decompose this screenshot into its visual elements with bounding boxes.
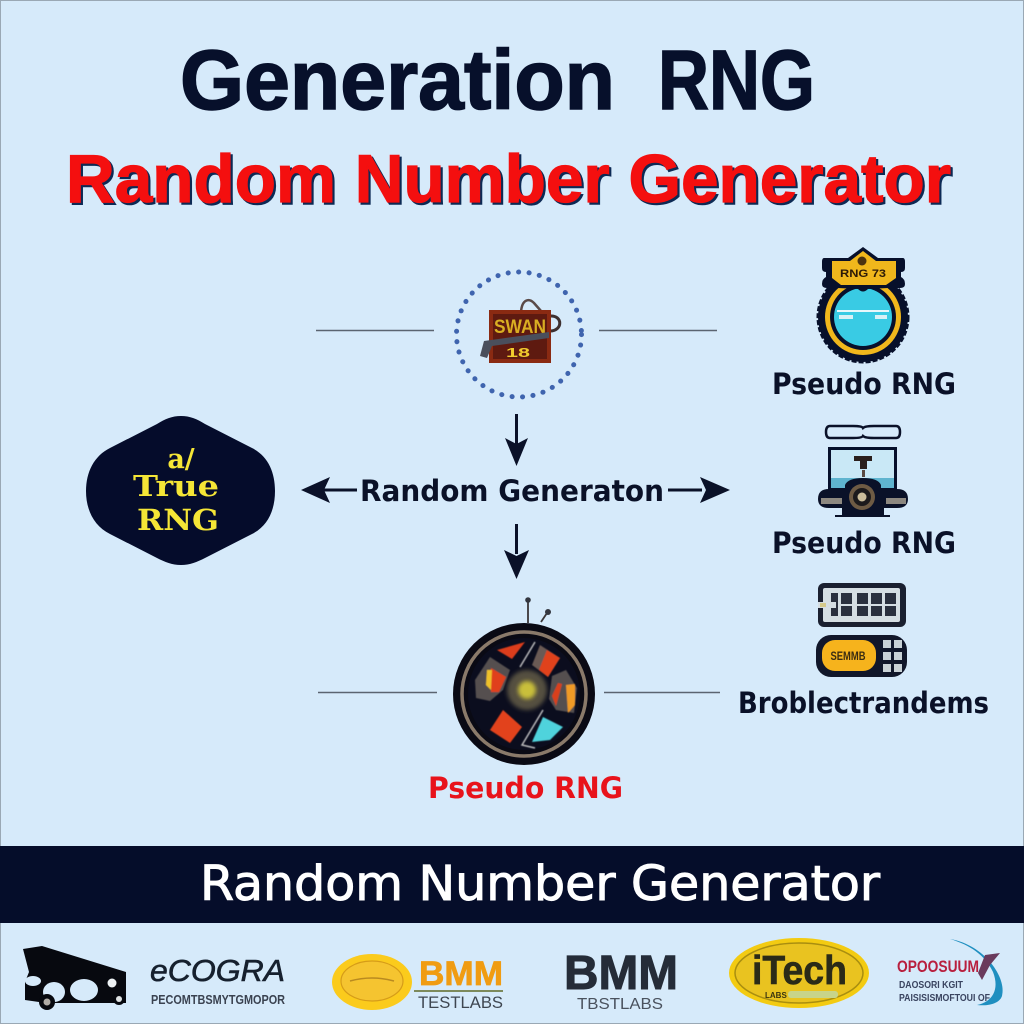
arrow: down to lower node [504,524,529,579]
item: badge icon [818,247,908,362]
arrow: left [301,477,357,503]
connector lines: top node [316,330,717,332]
logo: BMM Testlabs dark: TBSTLABS [577,996,663,1013]
logo: red and blue seal: OPOOSUUM [897,957,979,976]
title [180,33,815,127]
logo: BMM Testlabs gold coin: TESTLABS [418,993,503,1012]
connector lines: lower node [318,692,720,694]
node: True RNG [86,416,275,565]
footer band [0,846,1024,923]
title: RNG [658,33,815,127]
label: Pseudo RNG red: Pseudo RNG [428,771,623,805]
node: True RNG: True [133,469,219,503]
subtitle: Random Number Generator [66,141,951,217]
item: keypad card icon [816,583,907,677]
label: Random Generaton: Random Generaton [360,474,664,508]
logo: iTech Labs [729,938,869,1008]
item label: Broblectrandems: Broblectrandems [738,686,989,720]
arrow: down from top node [505,414,528,466]
icon: slot box in dotted circle [456,272,582,397]
logo: black vehicle [23,946,126,1010]
icon: slot box in dotted circle: SWAN [494,317,546,338]
node: True RNG: RNG [137,503,219,537]
item: badge icon: RNG 73 [840,268,886,280]
title: Generation [180,33,615,127]
logo: BMM Testlabs gold coin [332,954,503,1012]
icon: slot box in dotted circle: 18 [506,345,530,360]
logo: eCOGRA: eCOGRA [150,953,285,988]
logo: eCOGRA [150,953,286,1007]
logo: BMM Testlabs gold coin: BMM [419,955,503,993]
logo: iTech Labs: iTech [752,947,847,993]
arrow: right [668,477,730,503]
logo: BMM Testlabs dark: BMM [564,947,678,1000]
icon: colored wheel [453,597,595,765]
footer band text: Random Number Generator [200,856,880,912]
node: True RNG: a/ [167,444,195,475]
logo: iTech Labs: LABS [765,991,787,1000]
item: keypad card icon: SEMMB [830,649,866,663]
logo: red and blue seal [897,939,1003,1005]
logo: red and blue seal: DAOSORI KGIT [899,980,963,991]
logo: eCOGRA: PECOMTBSMYTGMOPOR [151,992,286,1007]
item label: Pseudo RNG 2: Pseudo RNG [772,526,956,560]
item: laptop icon [818,426,908,517]
item label: Pseudo RNG 1: Pseudo RNG [772,367,956,401]
subtitle: Random Number Generator [68,143,953,219]
logo: red and blue seal: PAISISISMOFTOUI OF [899,993,990,1004]
